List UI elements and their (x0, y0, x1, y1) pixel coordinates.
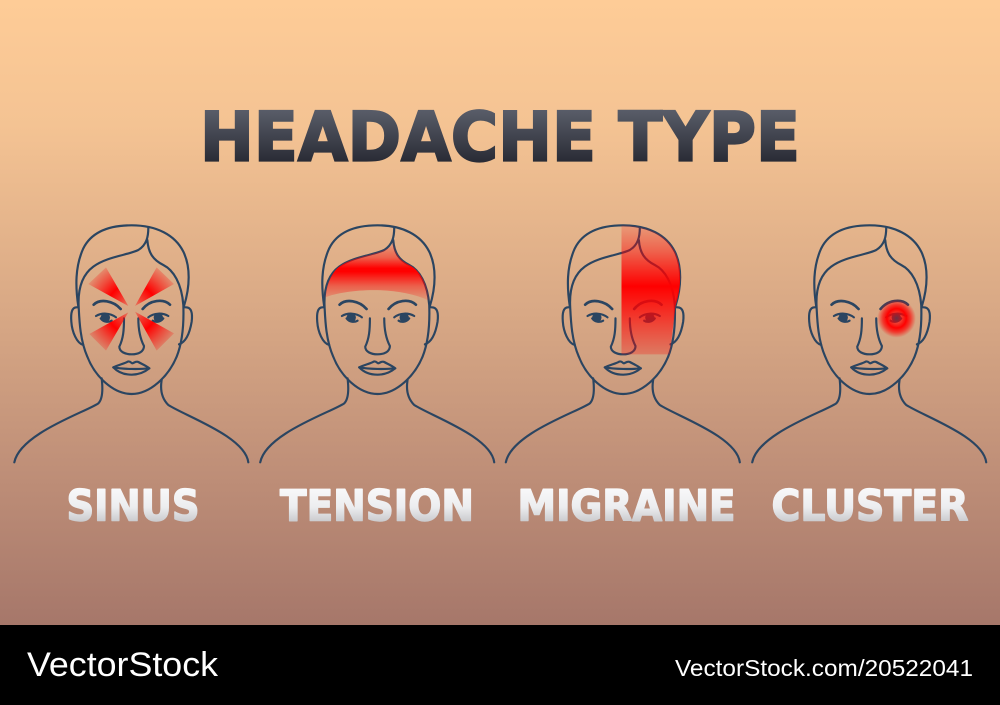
title: HEADACHE TYPE (200, 98, 800, 178)
label: migraine: MIGRAINE (518, 482, 736, 532)
figure: tension (260, 225, 494, 462)
figure: cluster (752, 225, 986, 462)
label: sinus: SINUS (66, 482, 200, 532)
pain area: around eye (877, 299, 916, 338)
footer bar (0, 625, 1000, 705)
pain area: half of head (621, 225, 680, 354)
footer image id: VectorStock.com/20522041 (675, 655, 973, 681)
panel: migraine headache (506, 225, 740, 531)
footer logo text: VectorStock (27, 646, 219, 684)
panel: cluster headache (752, 225, 986, 531)
panel: tension headache (260, 225, 494, 531)
label: cluster: CLUSTER (772, 482, 968, 532)
pain area: sinus rays (88, 267, 174, 351)
figure: migraine (506, 225, 740, 462)
label: tension: TENSION (280, 482, 474, 532)
panel: sinus headache (14, 225, 248, 531)
figure: sinus (14, 225, 248, 462)
pain area: forehead band (325, 240, 429, 301)
